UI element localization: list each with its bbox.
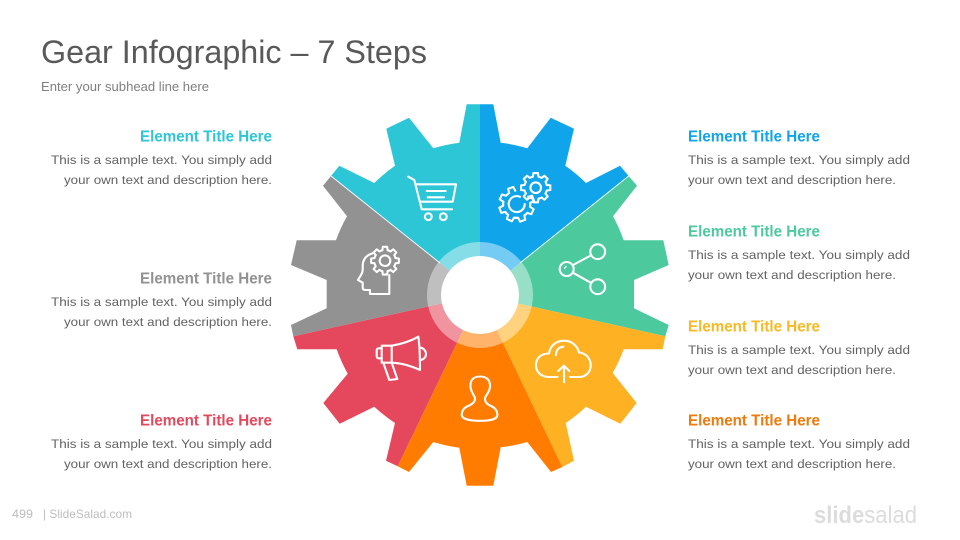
text block: teal step [51, 128, 272, 187]
icon: head with gear [358, 247, 399, 294]
text block: orange step: your own text and description here. [688, 457, 896, 471]
text block: red step: Element Title Here [140, 412, 272, 430]
center ring [434, 249, 526, 341]
segment: orange [398, 295, 562, 486]
text block: yellow step: This is a sample text. You simply add [688, 343, 910, 357]
segment: yellow [480, 295, 665, 467]
icon: person [462, 376, 497, 421]
footer page number and site: | SlideSalad.com [43, 507, 132, 521]
text block: yellow step: your own text and description here. [688, 363, 896, 377]
text block: gray step: This is a sample text. You simply add [51, 295, 272, 309]
text block: orange step: Element Title Here [688, 412, 820, 430]
segment seams [331, 176, 629, 263]
text block: yellow step [688, 318, 910, 377]
text block: green step: your own text and description here. [688, 268, 896, 282]
segment: blue [480, 104, 629, 295]
icon: share nodes [560, 244, 605, 294]
segment: green [480, 176, 669, 336]
text block: teal step: This is a sample text. You simply add [51, 153, 272, 167]
text block: red step [51, 412, 272, 471]
text block: blue step [688, 128, 910, 187]
logo: slidesalad: slidesalad [814, 502, 917, 529]
text block: blue step: Element Title Here [688, 128, 820, 146]
text block: red step: your own text and description here. [64, 457, 272, 471]
icon: megaphone [377, 337, 426, 380]
footer page number and site: 499 [12, 507, 33, 521]
icon: shopping cart [408, 177, 456, 220]
text block: red step: This is a sample text. You simply add [51, 437, 272, 451]
segment: red [293, 295, 480, 466]
text block: blue step: your own text and description here. [688, 173, 896, 187]
segment: teal [331, 104, 480, 295]
text block: green step: This is a sample text. You simply add [688, 248, 910, 262]
gear diagram [291, 104, 669, 486]
subtitle: Enter your subhead line here [41, 80, 209, 94]
text block: orange step [688, 412, 910, 471]
text block: gray step: your own text and description here. [64, 315, 272, 329]
text block: green step: Element Title Here [688, 224, 820, 240]
icon: cloud upload [536, 341, 591, 382]
text block: teal step: your own text and description here. [64, 173, 272, 187]
text block: blue step: This is a sample text. You simply add [688, 153, 910, 167]
segment: gray [291, 176, 480, 336]
text block: green step [688, 224, 910, 282]
text block: teal step: Element Title Here [140, 128, 272, 146]
text block: orange step: This is a sample text. You simply add [688, 437, 910, 451]
title: Gear Infographic – 7 Steps [41, 34, 427, 70]
text block: yellow step: Element Title Here [688, 318, 820, 336]
text block: gray step [51, 270, 272, 329]
icon: gears [498, 173, 550, 223]
text block: gray step: Element Title Here [140, 270, 272, 288]
